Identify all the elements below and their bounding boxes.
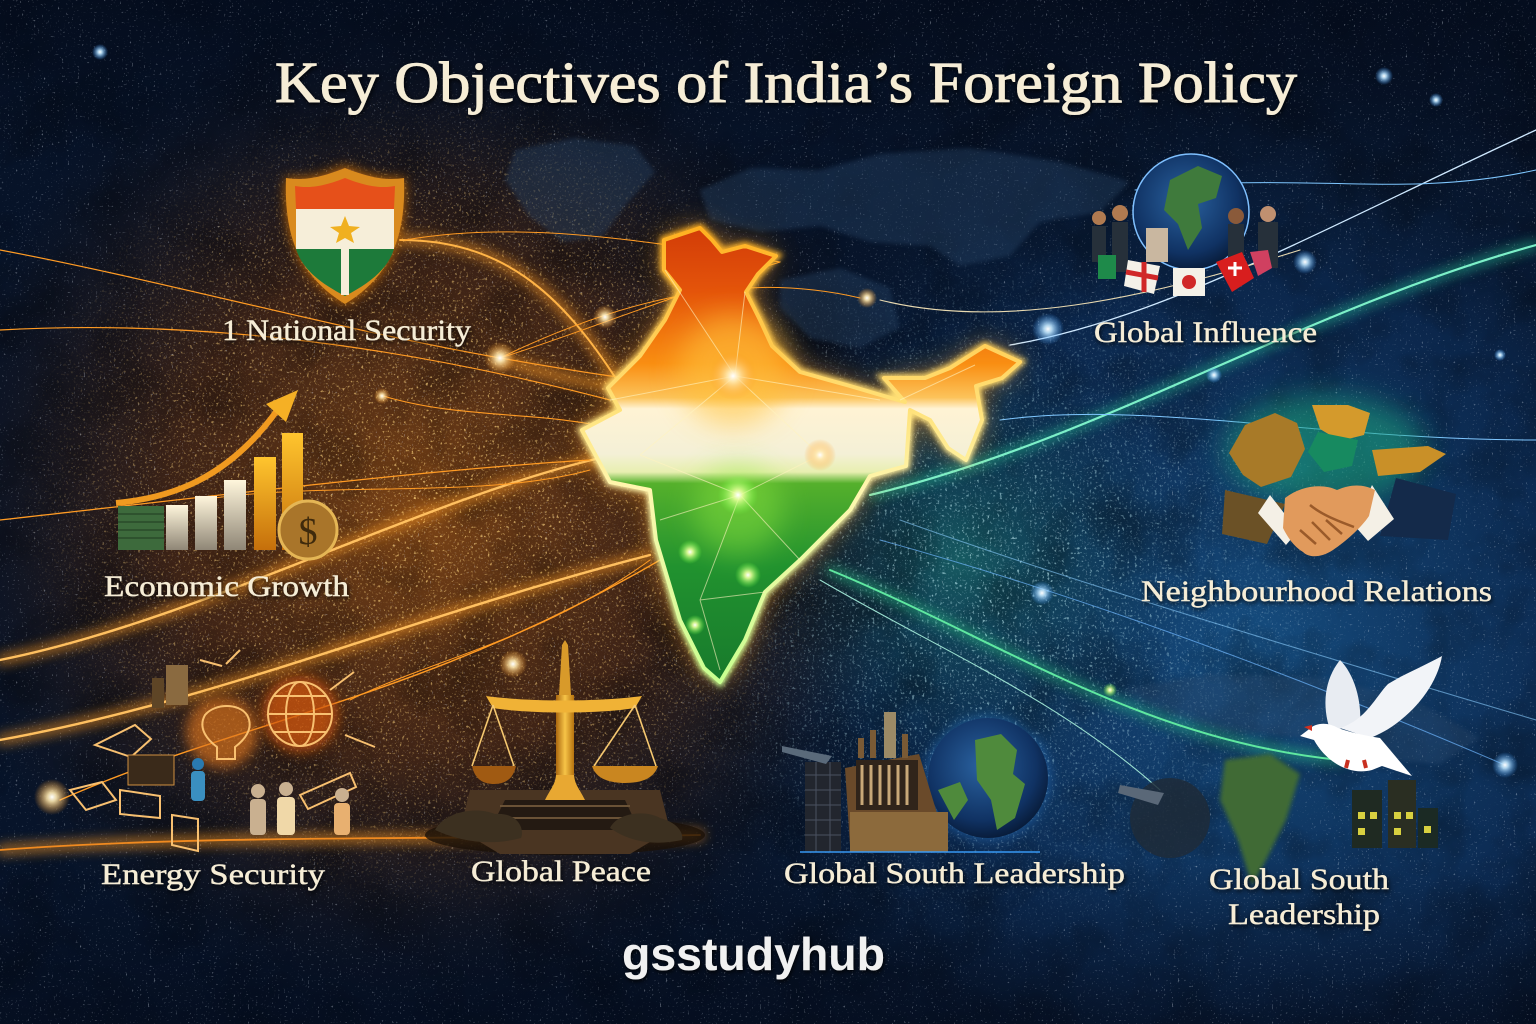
- India tricolour map: [582, 228, 1020, 682]
- glow nodes: [34, 44, 1518, 815]
- icon: economic growth bar chart: [116, 390, 337, 559]
- label: neighbourhood relations: Neighbourhood Relations: [1141, 575, 1492, 608]
- watermark: gsstudyhub: gsstudyhub: [622, 928, 885, 980]
- icon: economic growth bar chart: $: [298, 511, 318, 553]
- label: global peace: Global Peace: [471, 855, 651, 888]
- icon: factory and globe: [782, 712, 1050, 852]
- label: economic growth: Economic Growth: [104, 570, 349, 603]
- label: global south leadership: Global South Leadership: [784, 857, 1125, 890]
- label: energy security: Energy Security: [101, 858, 325, 891]
- icon: national security shield: [286, 166, 404, 304]
- icon: peace dove over city: [1118, 656, 1442, 886]
- label: global south leadership two lines: Global South: [1209, 863, 1389, 896]
- connection lines: orange network: [0, 232, 860, 850]
- label: national security: 1 National Security: [222, 314, 471, 347]
- world map backdrop: [505, 138, 1480, 764]
- icon: energy security cluster: [70, 650, 375, 851]
- icon: global peace scales: [425, 640, 705, 855]
- label: global south leadership two lines: [1209, 863, 1389, 931]
- icon: handshake over world: [1222, 395, 1456, 556]
- label: global south leadership two lines: Leadership: [1228, 898, 1380, 931]
- label: global influence: Global Influence: [1094, 316, 1317, 349]
- title: Key Objectives of India’s Foreign Policy: [275, 50, 1297, 115]
- connection lines: teal and blue network: [820, 130, 1536, 790]
- icon: globe with delegates and flags: [1092, 154, 1278, 296]
